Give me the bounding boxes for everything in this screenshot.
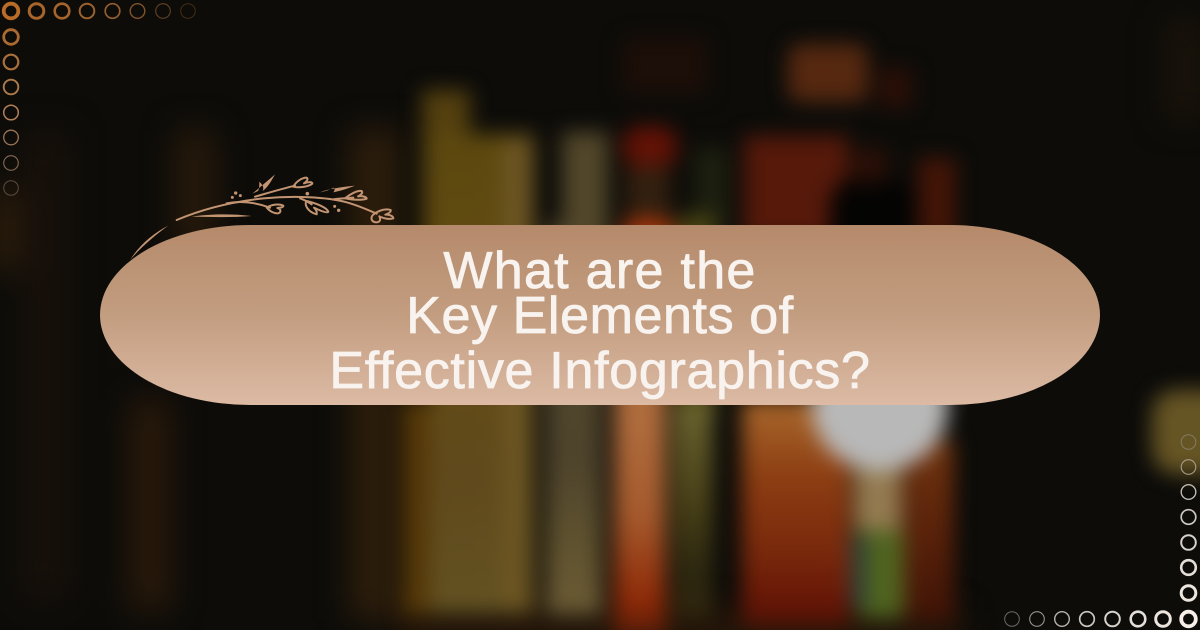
decoration: ring dots bottom-right xyxy=(1004,434,1198,628)
title: Key Elements of xyxy=(406,287,794,345)
decoration: ring dots top-left xyxy=(2,2,196,196)
title xyxy=(329,242,871,400)
title: What are the xyxy=(443,242,757,300)
panel: title pill xyxy=(100,225,1100,405)
title: Effective Infographics? xyxy=(329,342,871,400)
